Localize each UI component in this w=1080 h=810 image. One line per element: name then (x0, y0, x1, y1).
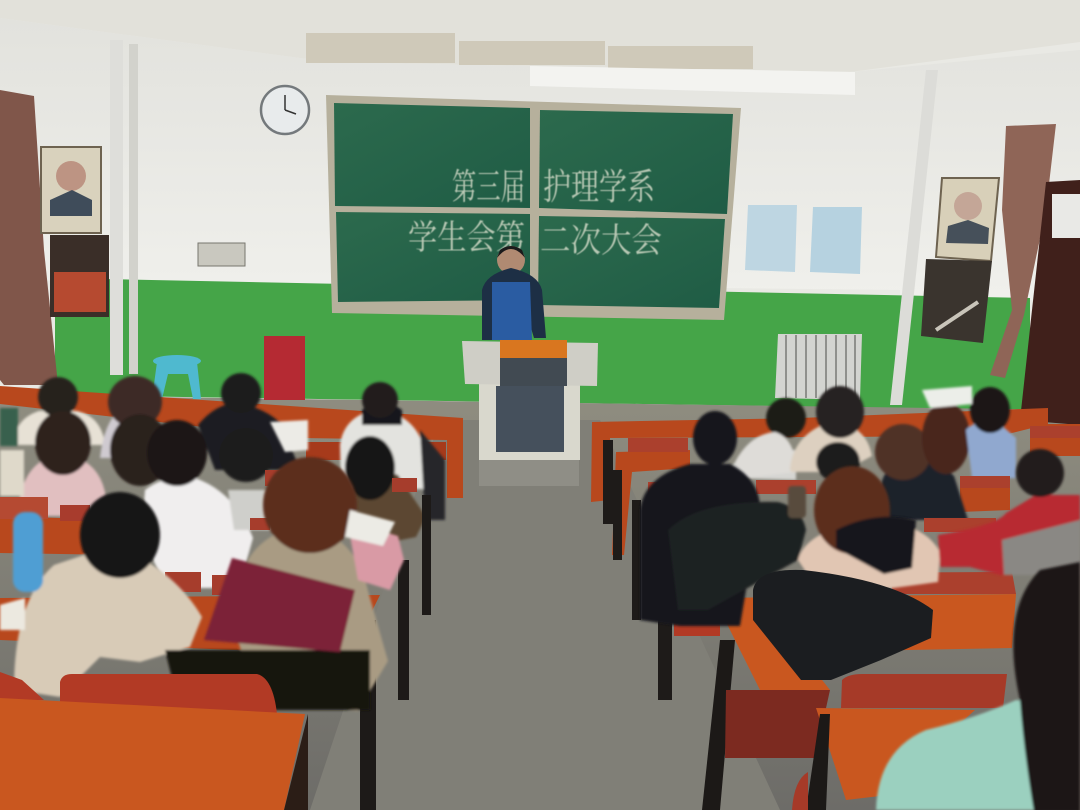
blue stool (152, 355, 201, 399)
chalk heading: 学生会第: 学生会第 (408, 219, 525, 257)
front backpack on desk (753, 570, 933, 680)
front right desk (792, 674, 1007, 810)
chalkboard (326, 95, 741, 320)
notice posters right (745, 205, 862, 274)
chalk heading: 第三届: 第三届 (452, 167, 525, 207)
left curtain (0, 90, 58, 385)
speaker (482, 246, 546, 340)
chalk heading: 护理学系: 护理学系 (543, 167, 655, 207)
portrait right (936, 178, 999, 261)
left rear desks (0, 386, 463, 498)
wall clock (261, 86, 309, 134)
front right student (876, 562, 1080, 810)
radiator (775, 334, 862, 400)
portrait left (41, 147, 101, 233)
right rear desks (591, 408, 1080, 555)
chalk heading: 二次大会: 二次大会 (540, 222, 662, 260)
front left desk (0, 672, 308, 810)
right students rear rows (726, 386, 1016, 520)
left mid desk rows (0, 470, 431, 810)
left front students (0, 420, 404, 711)
right curtain (990, 124, 1056, 378)
red fire box (264, 336, 305, 400)
right mid students (640, 411, 1080, 626)
dark framed picture right (921, 259, 992, 343)
wall switch box (198, 243, 245, 266)
dark poster left (50, 235, 109, 317)
door (1020, 180, 1080, 425)
right mid desks and chairs (603, 426, 1080, 810)
left students rear rows (0, 373, 445, 588)
podium (462, 340, 598, 486)
